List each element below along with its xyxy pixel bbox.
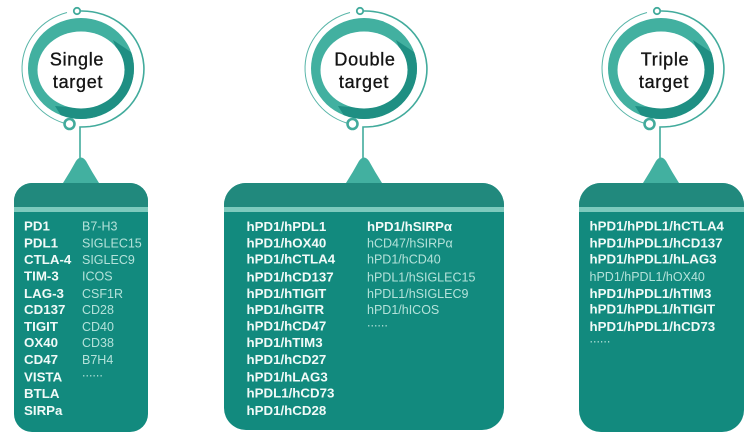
list: double target secondary: hPDL1/hSIGLEC9	[367, 287, 468, 301]
heading: Single target: Single	[50, 50, 104, 70]
list: single target primary: PDL1	[24, 236, 59, 250]
list: single target secondary: ICOS	[82, 270, 113, 284]
heading: Single target	[50, 50, 104, 92]
list: single target secondary	[82, 220, 142, 380]
list: single target primary: VISTA	[24, 370, 63, 384]
list: single target secondary: CD28	[82, 303, 114, 317]
list: single target primary: CTLA-4	[24, 252, 72, 267]
list: single target primary: SIRPa	[24, 403, 63, 418]
list: triple target: hPD1/hPDL1/hCD137	[590, 236, 723, 250]
list: double target secondary: hPD1/hCD40	[367, 252, 441, 266]
list: triple target: hPD1/hPDL1/hTIGIT	[590, 302, 715, 316]
heading: Triple target: target	[639, 72, 689, 92]
card: triple target	[579, 183, 744, 432]
heading: Triple target: Triple	[641, 50, 689, 70]
list: single target primary: TIM-3	[24, 268, 59, 284]
list: single target secondary: CSF1R	[82, 287, 123, 301]
panel: single target	[14, 8, 148, 432]
list: single target primary: BTLA	[24, 386, 60, 401]
list: single target primary: PD1	[24, 218, 50, 234]
list: single target secondary: SIGLEC9	[82, 253, 135, 267]
list: double target primary: hPD1/hCD28	[246, 403, 326, 418]
list: double target secondary	[367, 219, 475, 330]
connector: double target	[305, 8, 427, 183]
heading: Double target: target	[339, 72, 389, 92]
list: double target primary: hPDL1/hCD73	[246, 386, 334, 400]
list: double target primary: hPD1/hCD27	[246, 352, 326, 367]
list: single target secondary: B7-H3	[82, 220, 117, 234]
list: double target primary	[246, 219, 336, 418]
list: double target primary: hPD1/hOX40	[246, 236, 326, 250]
list: single target secondary: CD38	[82, 336, 114, 350]
list: double target primary: hPD1/hTIM3	[246, 335, 323, 350]
list: double target primary: hPD1/hGITR	[246, 302, 324, 317]
list: triple target: hPD1/hPDL1/hLAG3	[590, 252, 717, 266]
list: double target secondary: hPDL1/hSIGLEC15	[367, 270, 475, 284]
list: single target secondary: B7H4	[82, 353, 113, 367]
heading: Single target: target	[53, 72, 103, 92]
list: single target primary: LAG-3	[24, 286, 64, 301]
list: single target secondary: CD40	[82, 320, 114, 334]
list: single target primary: OX40	[24, 335, 58, 350]
list: double target secondary: hPD1/hSIRPα	[367, 219, 453, 234]
list: double target primary: hPD1/hCD137	[246, 270, 334, 284]
list: double target primary: hPD1/hPDL1	[246, 219, 327, 234]
card: double target	[224, 183, 504, 430]
list: double target primary: hPD1/hCTLA4	[246, 252, 336, 266]
heading: Triple target	[639, 50, 689, 92]
list: double target primary: hPD1/hLAG3	[246, 370, 328, 384]
panel: triple target	[579, 8, 744, 432]
list: triple target: hPD1/hPDL1/hCD73	[590, 319, 715, 334]
list: double target secondary: hPD1/hICOS	[367, 303, 439, 317]
list: single target secondary: ......	[82, 366, 103, 380]
list: double target primary: hPD1/hTIGIT	[246, 286, 326, 301]
list: single target secondary: SIGLEC15	[82, 236, 142, 250]
list: single target primary: TIGIT	[24, 319, 58, 334]
list: single target primary: CD137	[24, 302, 65, 317]
connector: triple target	[602, 8, 724, 183]
connector: single target	[22, 8, 144, 183]
list: double target secondary: ......	[367, 316, 388, 330]
heading: Double target: Double	[334, 50, 396, 70]
list: triple target: hPD1/hPDL1/hCTLA4	[590, 218, 725, 234]
heading: Double target	[334, 50, 396, 92]
list: single target primary: CD47	[24, 352, 58, 367]
list: single target primary	[24, 218, 72, 418]
list: triple target: ......	[590, 332, 610, 346]
list: triple target: hPD1/hPDL1/hTIM3	[590, 286, 711, 301]
panel: double target	[224, 8, 504, 430]
list: triple target: hPD1/hPDL1/hOX40	[590, 270, 705, 284]
list: triple target	[590, 218, 725, 346]
list: double target primary: hPD1/hCD47	[246, 318, 326, 334]
card: single target	[14, 183, 148, 432]
list: double target secondary: hCD47/hSIRPα	[367, 236, 453, 250]
